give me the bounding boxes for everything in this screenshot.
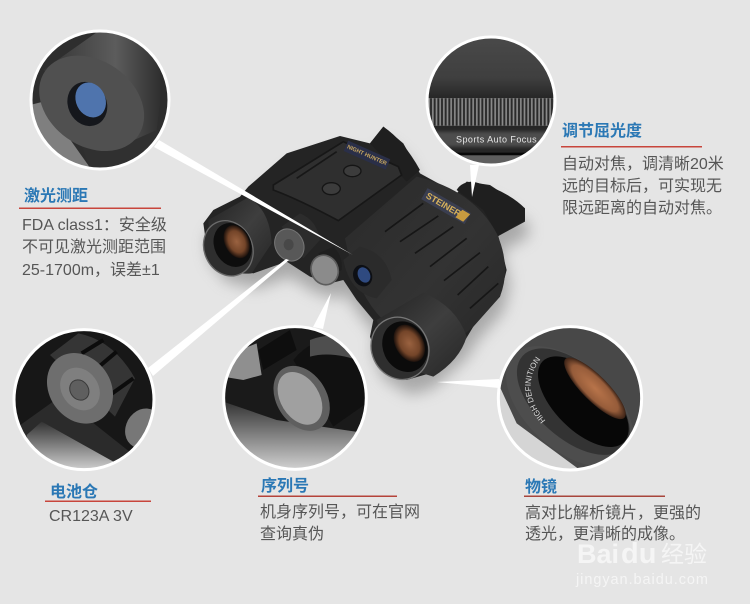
pointer: battery <box>148 259 289 376</box>
circle: laser rangefinder close-up <box>21 30 173 171</box>
callout: laser rangefinding: 不可见激光测距范围 <box>22 238 166 256</box>
Steiner logo <box>421 188 471 224</box>
plate badge: NIGHT HUNTER <box>346 144 387 167</box>
right objective lens <box>361 308 439 389</box>
body grooves <box>385 203 498 308</box>
circle: objective lens close-up: HIGH DEFINITION <box>525 356 546 424</box>
callout: objective lens <box>524 477 701 543</box>
callout: diopter adjustment: 限远距离的自动对焦。 <box>562 199 722 217</box>
callout: serial number: 序列号 <box>261 476 309 495</box>
pointer: objective <box>437 379 499 388</box>
circle: battery compartment close-up <box>12 328 156 471</box>
callout: laser rangefinding: 激光测距 <box>24 187 88 205</box>
callout: battery compartment: 电池仓 <box>50 482 98 501</box>
left barrel <box>208 197 272 274</box>
right barrel <box>377 293 467 377</box>
watermark: du <box>621 538 656 570</box>
callout: objective lens: 高对比解析镜片，更强的 <box>525 503 701 522</box>
callout: battery compartment: CR123A 3V <box>49 508 133 525</box>
plate groove <box>297 152 337 178</box>
callout: laser rangefinding: FDA class1：安全级 <box>22 216 167 234</box>
watermark <box>575 538 708 588</box>
callout: diopter adjustment: 调节屈光度 <box>562 121 642 140</box>
watermark: 经验 <box>661 541 707 567</box>
callout: serial number: 查询真伪 <box>260 525 324 543</box>
Steiner logo: STEINER <box>424 191 463 219</box>
circle: focus ring close-up <box>426 36 556 166</box>
binoculars product photo <box>195 127 528 395</box>
callout: objective lens: 物镜 <box>525 477 557 496</box>
circle: serial number close-up <box>223 325 367 473</box>
right body <box>345 177 505 363</box>
callout: serial number <box>258 476 420 543</box>
pointer: serial <box>313 293 331 329</box>
callout: laser rangefinding <box>19 187 167 279</box>
serial cap <box>306 247 343 289</box>
callout: diopter adjustment: 远的目标后，可实现无 <box>562 177 722 195</box>
binocular silhouette <box>203 127 525 380</box>
top plate <box>273 142 402 221</box>
callout: diopter adjustment: 自动对焦，调清晰20米 <box>562 155 724 173</box>
pointer: laser <box>154 140 353 255</box>
watermark: jingyan.baidu.com <box>575 572 708 588</box>
ground shadow <box>207 142 528 395</box>
callout: objective lens: 透光，更清晰的成像。 <box>525 525 685 543</box>
callout: serial number: 机身序列号，可在官网 <box>260 503 420 521</box>
plate buttons <box>322 165 361 195</box>
pointer: focus <box>470 165 479 197</box>
rear eyecups <box>370 127 525 236</box>
plate badge <box>344 141 390 170</box>
left objective lens <box>195 213 262 284</box>
watermark: Bai <box>577 539 619 569</box>
circle: focus ring close-up: Sports Auto Focus <box>456 134 537 144</box>
pointer lines <box>148 140 499 388</box>
callout: battery compartment <box>45 482 151 525</box>
focus knob <box>269 213 320 266</box>
circle: objective lens close-up <box>497 325 643 472</box>
callout: diopter adjustment <box>561 121 724 217</box>
laser tube <box>343 247 392 298</box>
callout: laser rangefinding: 25-1700m，误差±1 <box>22 261 160 279</box>
